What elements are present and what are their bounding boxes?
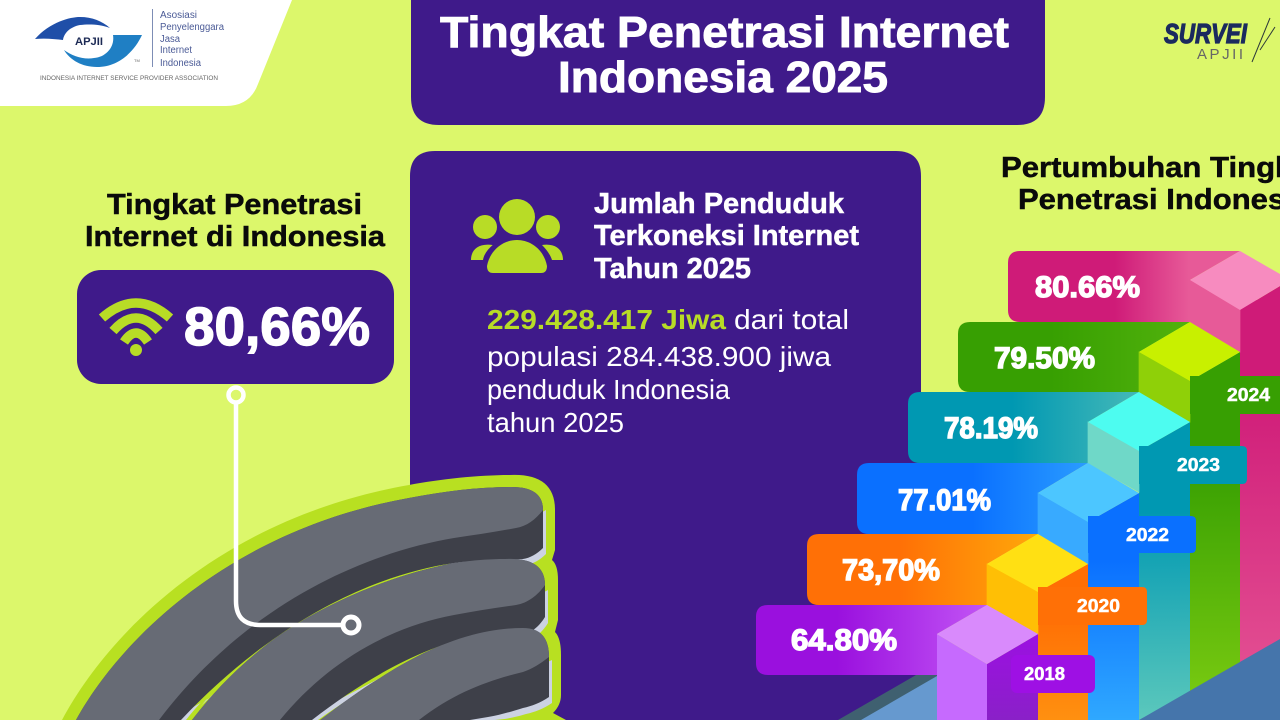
heading: growth (1001, 152, 1280, 216)
panel: title (411, 0, 1045, 125)
step: 2024: 80.66% (1035, 271, 1140, 304)
step: 2023: 79.50% (994, 342, 1095, 375)
step: 2020 (807, 534, 1147, 720)
icon: APJII swoosh: APJII (75, 36, 103, 48)
text: population detail: 229.428.417 Jiwa (487, 304, 726, 335)
step: 2018: 64.80% (791, 624, 897, 657)
icon: APJII swoosh (35, 17, 142, 67)
panel: population (410, 151, 921, 720)
arc 1 (76, 487, 546, 720)
step: 2021: 77.01% (898, 484, 991, 517)
heading: connected population: Jumlah Penduduk (594, 188, 844, 220)
logo divider and name: Internet (160, 45, 192, 56)
heading: penetration (85, 189, 386, 253)
panel: APJII logo (0, 0, 292, 106)
logo divider and name: Indonesia (160, 58, 201, 69)
label: 2023: 2023 (1177, 455, 1220, 475)
step: 2024 (1008, 251, 1280, 720)
label: 2018: 2018 (1024, 664, 1065, 684)
logo: Survei APJII: APJII (1197, 46, 1243, 63)
heading: growth: Penetrasi Indonesia (1018, 184, 1280, 216)
text: population detail (487, 304, 849, 438)
label: 2024: 2024 (1227, 385, 1270, 405)
title: Tingkat Penetrasi Internet (440, 8, 1009, 57)
logo: Survei APJII (1164, 18, 1275, 63)
base planes (838, 675, 937, 720)
heading: connected population (594, 188, 860, 285)
heading: penetration: Tingkat Penetrasi (107, 189, 362, 221)
heading: connected population: Terkoneksi Internet (594, 220, 860, 252)
logo divider and name: Jasa (160, 34, 180, 45)
logo divider and name: Penyelenggara (160, 22, 224, 33)
base plane: right (1139, 639, 1280, 720)
arc gap wedge (186, 688, 216, 720)
icon: wifi (102, 303, 170, 356)
logo tagline: INDONESIA INTERNET SERVICE PROVIDER ASSOCIATION (40, 75, 218, 82)
text: population detail: penduduk Indonesia (487, 374, 730, 405)
chart: staircase growth (756, 251, 1280, 720)
illustration: 3D wifi arcs (62, 475, 566, 720)
step: 2018 (756, 605, 1095, 720)
label: 2022 (1088, 516, 1196, 553)
heading: connected population: Tahun 2025 (594, 253, 751, 285)
step: 2022: 78.19% (944, 412, 1038, 445)
arc 3 (320, 628, 552, 720)
step: 2022 (908, 392, 1247, 720)
heading: penetration: Internet di Indonesia (85, 221, 386, 253)
label: 2020: 2020 (1077, 596, 1120, 616)
arc outline (62, 475, 566, 720)
title (440, 8, 1009, 102)
stat value: 80,66% (184, 297, 370, 357)
step: 2021 (857, 463, 1196, 720)
label: 2024 (1190, 376, 1280, 414)
panel: 80,66% stat (77, 270, 394, 384)
title: Indonesia 2025 (558, 53, 888, 102)
connector line (228, 388, 359, 633)
logo divider and name: Asosiasi (160, 10, 197, 21)
icon: APJII swoosh: TM (134, 58, 140, 63)
arc 2 (192, 559, 548, 720)
text: population detail: tahun 2025 (487, 407, 624, 438)
label: 2020 (1038, 587, 1147, 625)
text: population detail: dari total (734, 304, 849, 335)
logo divider and name (152, 9, 224, 69)
icon: people (471, 199, 563, 273)
text: population detail: populasi 284.438.900 jiwa (487, 341, 831, 372)
logo: Survei APJII: SURVEI (1164, 18, 1248, 49)
step: 2020: 73,70% (842, 554, 940, 587)
step: 2023 (958, 322, 1280, 720)
label: 2018 (1011, 655, 1095, 693)
label: 2023 (1139, 446, 1247, 484)
label: 2022: 2022 (1126, 525, 1169, 545)
